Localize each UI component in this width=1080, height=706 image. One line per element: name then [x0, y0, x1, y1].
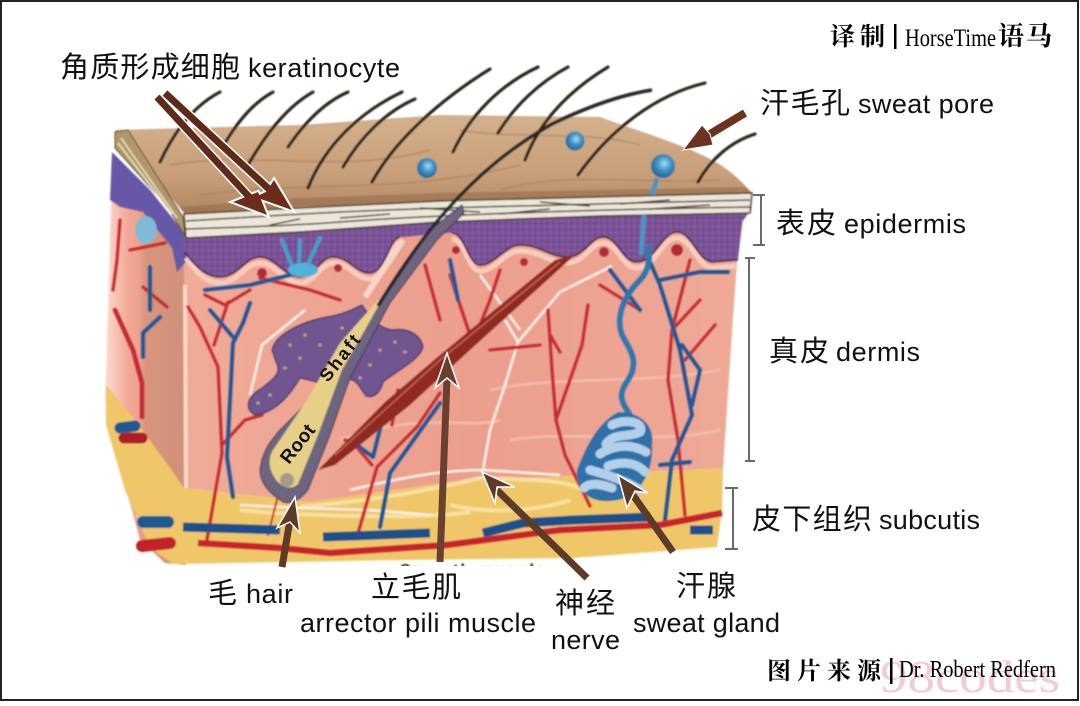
- hair follicle sheath: [260, 205, 464, 503]
- dermis front face: [184, 210, 745, 502]
- surface hairs: [160, 67, 755, 188]
- skin block illustration: [105, 67, 755, 579]
- blue veins: [143, 260, 728, 527]
- left side face of the skin block: [105, 170, 186, 565]
- main subcutis artery: [198, 513, 722, 553]
- credit: translated by: 译制: [830, 17, 885, 53]
- hair labels on shaft and root: Root: [276, 420, 320, 468]
- wavy epidermal edge line: [184, 232, 738, 277]
- red arteries: [113, 220, 715, 540]
- corner band on the left side: [115, 130, 185, 236]
- label: hair: hair: [246, 579, 293, 609]
- arrow: hair: [277, 497, 300, 567]
- bracket: dermis: [745, 258, 755, 461]
- stratum corneum white band, front: [184, 193, 752, 238]
- bracket: epidermis: [753, 195, 765, 245]
- sweat pore droplets: [417, 132, 675, 255]
- label: nerve: [551, 587, 620, 655]
- droplet two: [566, 132, 584, 150]
- label: epidermis: epidermis: [844, 209, 966, 239]
- label: epidermis: 表皮: [776, 207, 836, 240]
- label: sweat gland: [633, 570, 780, 638]
- arrector pili muscle: [318, 254, 576, 470]
- credit: image source: [767, 651, 1056, 686]
- label: dermis: dermis: [836, 337, 920, 367]
- label: subcutis: 皮下组织: [752, 503, 872, 536]
- sweat duct: [620, 245, 649, 418]
- watermark: 98codes: [880, 651, 1060, 702]
- band lamina lines: [186, 200, 750, 229]
- Smooth muscle text, clipped by white mask: Smooth muscle: [400, 562, 545, 579]
- label: sweat gland: 汗腺: [676, 570, 736, 603]
- epidermis purple layer, front with wavy lower edge: [184, 208, 752, 277]
- arrow: nerve: [482, 472, 587, 578]
- label: sweat pore: 汗毛孔: [760, 87, 850, 120]
- tan skin surface, top face: [115, 115, 752, 214]
- credit: image source: 图片来源: [767, 651, 883, 686]
- arrow: keratinocyte: [157, 93, 292, 215]
- droplet three: [651, 154, 675, 178]
- hair labels on shaft and root: Shaft: [315, 331, 364, 385]
- label: sweat gland: sweat gland: [633, 608, 780, 638]
- bracket: subcutis: [725, 488, 738, 549]
- label: arrector pili muscle: 立毛肌: [371, 571, 461, 604]
- hair root and shaft: [270, 300, 382, 488]
- surface texture: [170, 130, 720, 195]
- label: nerve: 神经: [555, 587, 615, 620]
- arrow: sweat pore: [683, 113, 745, 150]
- arrow: arrector pili muscle: [435, 353, 459, 562]
- arrow: sweat gland: [618, 475, 673, 552]
- fat layer highlights: [240, 478, 580, 516]
- droplet one: [417, 158, 437, 178]
- epidermis purple layer, side: [110, 152, 186, 272]
- papilla vessel knots: [257, 244, 683, 278]
- credit: image source: Dr. Robert Redfern: [899, 657, 1056, 683]
- sensory receptor in epidermis: [282, 238, 320, 277]
- label: dermis: 真皮: [769, 335, 829, 368]
- label: sweat pore: sweat pore: [858, 89, 994, 119]
- credit: translated by: [830, 16, 1052, 53]
- sweat gland coil: [577, 412, 652, 501]
- pale fringe under the papillae: [186, 238, 736, 283]
- nerve fibres: [240, 266, 612, 515]
- left band fibres: [118, 138, 177, 218]
- label: keratinocyte: 角质形成细胞: [60, 51, 240, 84]
- dermis edge highlight: [185, 285, 186, 488]
- sebaceous gland: [248, 305, 423, 415]
- muscle fibre lines: [335, 262, 560, 455]
- label: keratinocyte: keratinocyte: [248, 53, 400, 83]
- gland dots: [256, 326, 407, 405]
- hair labels on shaft and root: [276, 331, 364, 468]
- label: arrector pili muscle: arrector pili muscle: [300, 608, 536, 638]
- severed vessel stubs, left: [120, 426, 170, 546]
- hair bulb: [280, 473, 294, 487]
- label: arrector pili muscle: [300, 571, 536, 638]
- surface lower shadow: [180, 187, 752, 214]
- long hair emerging through the surface: [378, 90, 652, 306]
- pale tube below the epidermis: [365, 240, 403, 297]
- side receptor: [135, 216, 157, 244]
- credit: translated by: HorseTime: [905, 25, 996, 52]
- white mask below illustration: [175, 566, 735, 596]
- credit: translated by: 语马: [998, 16, 1052, 53]
- purple layer stipple: [184, 208, 752, 277]
- main subcutis vein: [183, 517, 713, 537]
- label: nerve: nerve: [551, 625, 620, 655]
- label: subcutis: subcutis: [879, 505, 980, 535]
- duct from sweat pore: [641, 178, 657, 255]
- dermis light streaks: [340, 370, 720, 440]
- subcutis fat layer, front and side: [106, 385, 723, 564]
- label: hair: 毛: [208, 577, 237, 610]
